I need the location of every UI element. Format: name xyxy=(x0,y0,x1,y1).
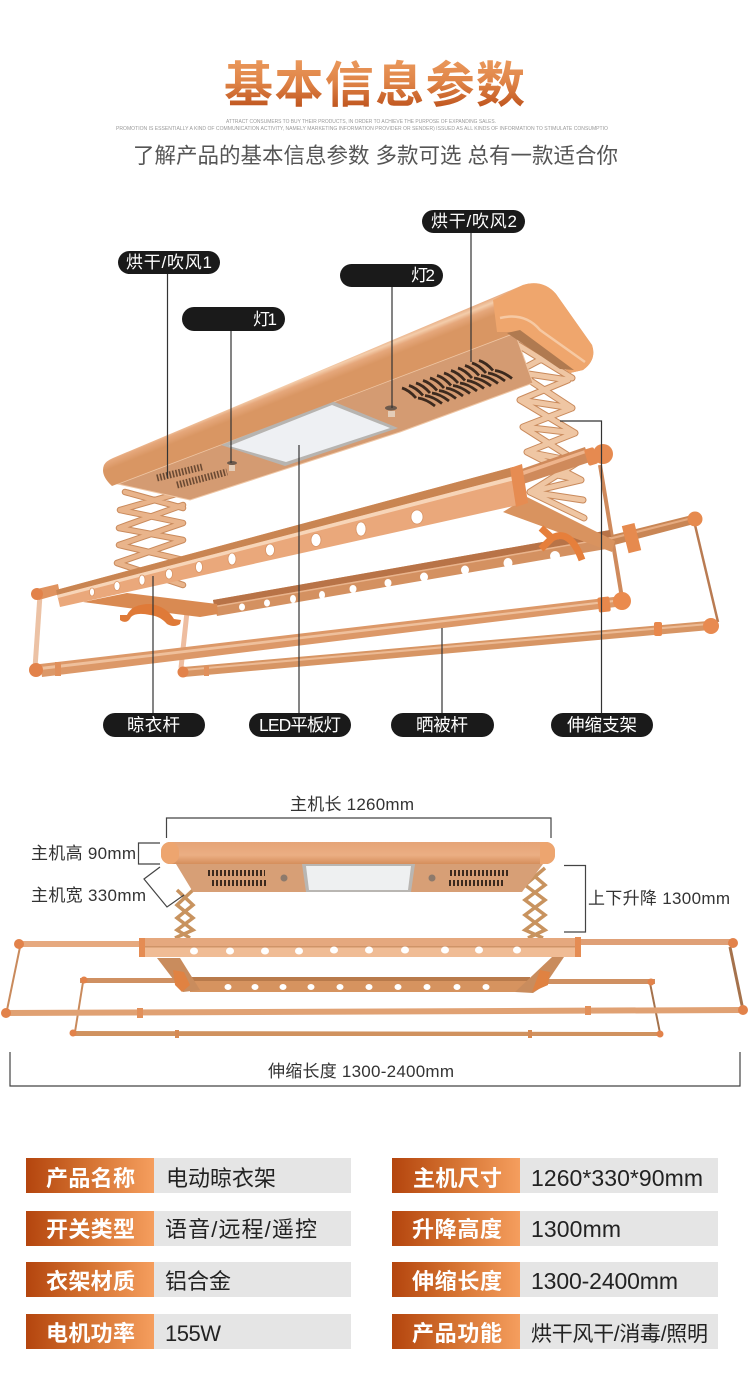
quilt rod front xyxy=(29,592,631,677)
row: host size xyxy=(392,1158,718,1193)
row: host size: 1260*330*90mm xyxy=(531,1165,703,1191)
rear bar rods xyxy=(80,976,655,986)
LED panel xyxy=(302,864,415,892)
dimension: telescopic length xyxy=(10,1052,740,1086)
row: telescopic length: 伸缩长度 xyxy=(412,1269,502,1294)
row: motor power: 155W xyxy=(165,1321,221,1346)
row: product name: 电动晾衣架 xyxy=(166,1166,276,1191)
dimension: host width: 主机宽 330mm xyxy=(31,886,146,905)
right vent grille xyxy=(402,360,512,406)
dimension: lifting height: 上下升降 1300mm xyxy=(588,889,730,908)
callout: clothes rod xyxy=(103,713,205,737)
right scissor arm xyxy=(515,343,584,518)
vents xyxy=(208,873,508,883)
host underside panel xyxy=(118,333,533,500)
left hook bracket xyxy=(83,593,218,626)
callout: quilt rod: 晒被杆 xyxy=(416,715,468,735)
drying bar front xyxy=(31,444,613,607)
quilt rod rear xyxy=(178,618,719,678)
row: product name: 产品名称 xyxy=(46,1166,135,1191)
row: material: 衣架材质 xyxy=(46,1269,135,1294)
callout: light 2: 灯2 xyxy=(411,266,435,285)
drying bar rear xyxy=(213,530,612,616)
row: product functions: 烘干风干/消毒/照明 xyxy=(531,1323,708,1346)
dimension: lifting height xyxy=(564,866,730,932)
row: motor power xyxy=(26,1314,351,1349)
row: product functions: 产品功能 xyxy=(412,1321,502,1346)
row: material: 铝合金 xyxy=(165,1269,231,1294)
product perspective illustration xyxy=(29,283,719,678)
english tagline: ATTRACT CONSUMERS TO BUY THEIR PRODUCTS, IN ORDER TO ACHIEVE THE PURPOSE OF EXPANDING SALES. xyxy=(226,119,496,125)
spec table left xyxy=(26,1158,351,1349)
callout lines xyxy=(153,233,602,713)
row: product name xyxy=(26,1158,351,1193)
title: 基本信息参数 xyxy=(224,46,525,117)
left lamp xyxy=(227,461,237,471)
dimension: host height: 主机高 90mm xyxy=(31,844,136,863)
callout: light 1 xyxy=(182,307,285,331)
row: product functions xyxy=(392,1314,718,1349)
callout: telescopic bracket xyxy=(551,713,653,737)
row: motor power: 电机功率 xyxy=(46,1321,135,1346)
row: material xyxy=(26,1262,351,1297)
host casing xyxy=(161,842,555,864)
callout: clothes rod: 晾衣杆 xyxy=(127,715,180,735)
callout: dryer 2 xyxy=(422,210,525,233)
left scissor arm xyxy=(117,492,183,585)
LED flat panel xyxy=(221,401,398,466)
row: lifting height: 1300mm xyxy=(531,1216,621,1242)
callout: LED panel light: LED平板灯 xyxy=(259,715,341,735)
callout: light 2 xyxy=(340,264,443,287)
host casing xyxy=(103,283,593,486)
row: switch type: 语音/远程/遥控 xyxy=(165,1217,317,1242)
bracket arms xyxy=(157,957,564,993)
english tagline: PROMOTION IS ESSENTIALLY A KIND OF COMMUNICATION ACTIVITY, NAMELY MARKETING INFORMATION PROVIDER OR SENDER) ISSUED AS ALL KINDS OF INFORMATION TO STIMULATE CONSUMPTIO xyxy=(116,126,608,132)
subtitle: 了解产品的基本信息参数 多款可选 总有一款适合你 xyxy=(133,144,618,168)
front drying bar xyxy=(139,937,581,957)
rear rod clip and cap xyxy=(622,512,702,553)
callout: LED panel light xyxy=(249,713,351,737)
row: host size: 主机尺寸 xyxy=(413,1166,502,1191)
row: switch type xyxy=(26,1211,351,1246)
straps xyxy=(7,947,743,1033)
row: telescopic length: 1300-2400mm xyxy=(531,1268,678,1294)
callout: dryer 1: 烘干/吹风1 xyxy=(126,253,212,272)
dimension: telescopic length: 伸缩长度 1300-2400mm xyxy=(268,1062,454,1081)
dimension: host width xyxy=(31,867,184,907)
telescopic straps xyxy=(35,465,718,668)
scissor arms xyxy=(175,868,545,938)
dimension: host length xyxy=(166,795,551,838)
rear drying bar xyxy=(190,977,530,992)
row: switch type: 开关类型 xyxy=(46,1217,135,1242)
product front elevation illustration xyxy=(1,842,748,1038)
callout: telescopic bracket: 伸缩支架 xyxy=(567,715,637,735)
right hook bracket xyxy=(503,497,615,560)
row: lifting height xyxy=(392,1211,718,1246)
row: telescopic length xyxy=(392,1262,718,1297)
callout: light 1: 灯1 xyxy=(253,310,277,329)
dimension: host length: 主机长 1260mm xyxy=(290,795,414,814)
front drying rods xyxy=(14,938,738,949)
quilt rods xyxy=(1,1005,748,1038)
host panel xyxy=(176,864,543,892)
callout: dryer 2: 烘干/吹风2 xyxy=(431,212,517,231)
lamps xyxy=(280,874,436,882)
callout: quilt rod xyxy=(391,713,494,737)
right lamp xyxy=(385,406,397,417)
spec table right xyxy=(392,1158,718,1349)
left vent grille xyxy=(157,467,227,485)
english tagline xyxy=(116,119,608,132)
rear rod right xyxy=(600,515,694,548)
row: lifting height: 升降高度 xyxy=(412,1217,502,1242)
callout: dryer 1 xyxy=(118,251,220,274)
